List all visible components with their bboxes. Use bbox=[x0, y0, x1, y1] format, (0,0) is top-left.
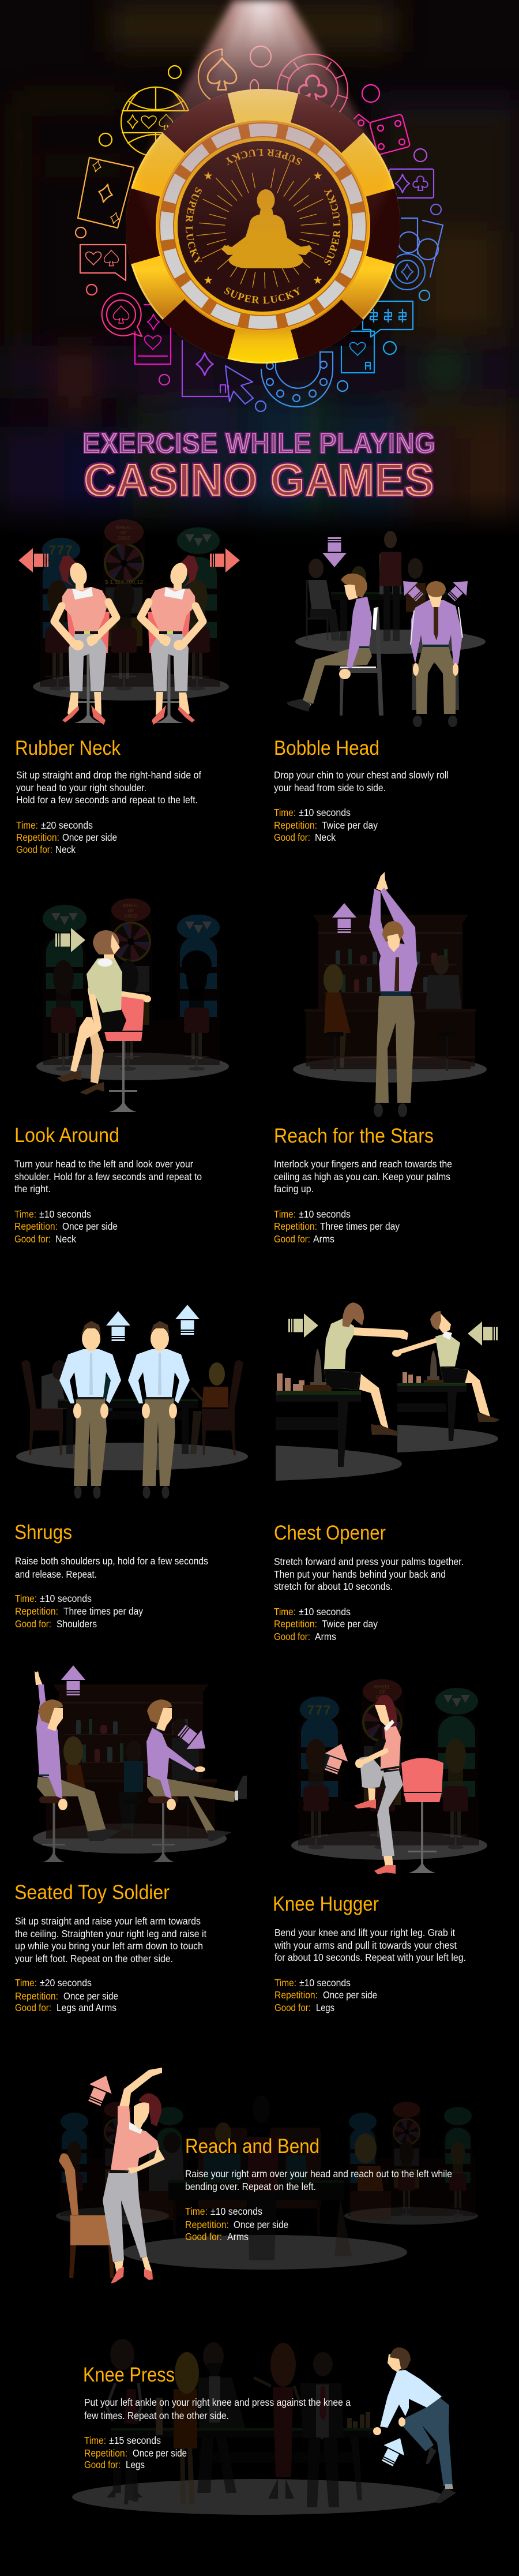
title line two: CASINO GAMES bbox=[84, 454, 434, 506]
text: Rubber Neck: Good for: bbox=[16, 844, 52, 855]
icon: phone bbox=[135, 305, 171, 364]
illustration: slot machines backdrop: GOLD bbox=[124, 913, 138, 919]
icon: spade chip bbox=[198, 49, 258, 104]
neon icon ring bbox=[76, 46, 443, 411]
icon: purple card bbox=[182, 340, 228, 396]
arrow: chin down bbox=[322, 537, 347, 567]
text: Look Around: Time: bbox=[14, 1208, 36, 1220]
text: Look Around: shoulder. Hold for a few seconds and repeat to bbox=[14, 1171, 202, 1182]
text: Rubber Neck: Once per side bbox=[62, 832, 117, 843]
text: Seated Toy Soldier: your left foot. Repeat on the other side. bbox=[15, 1953, 173, 1964]
text: Seated Toy Soldier: the ceiling. Straighten your right leg and raise it bbox=[15, 1928, 206, 1940]
chip dark segments bbox=[126, 93, 400, 359]
arrow: look right bbox=[55, 928, 85, 952]
text: Rubber Neck: your head to your right shoulder. bbox=[16, 782, 146, 793]
text: Reach for the Stars: ceiling as high as you can. Keep your palms bbox=[274, 1171, 450, 1182]
icon: spade speech bubble bbox=[102, 293, 142, 336]
text: Seated Toy Soldier: Good for: bbox=[15, 2002, 51, 2013]
text: Reach for the Stars bbox=[274, 1125, 452, 1245]
text: Knee Hugger: Legs bbox=[316, 2002, 334, 2013]
text: Knee Hugger: Once per side bbox=[323, 1989, 377, 2001]
figure: woman stretching forward bbox=[324, 1302, 408, 1436]
text: Look Around: Look Around bbox=[14, 1124, 119, 1147]
text: Chest Opener bbox=[274, 1522, 464, 1642]
figure: seated man arm raised bbox=[35, 1671, 121, 1862]
text: Shrugs: Shoulders bbox=[57, 1618, 97, 1630]
text: Bobble Head: Repetition: bbox=[274, 819, 317, 831]
figure: woman stretching back bbox=[392, 1311, 500, 1422]
illustration: bar backdrop bbox=[293, 915, 487, 1083]
illustration: slot machines backdrop: GOLD bbox=[117, 536, 131, 541]
chip stars bbox=[203, 170, 323, 287]
illustration: slot machines backdrop: OF bbox=[127, 908, 134, 913]
text: Rubber Neck: Neck bbox=[55, 844, 76, 855]
text: Shrugs: and release. Repeat. bbox=[15, 1568, 97, 1580]
text: Shrugs: Repetition: bbox=[15, 1605, 58, 1617]
text: Bobble Head: your head from side to side. bbox=[274, 782, 386, 793]
panel: Shrugs bbox=[14, 1305, 248, 1630]
figure: woman tilting head right bbox=[141, 555, 203, 725]
text: Seated Toy Soldier: ±20 seconds bbox=[40, 1977, 92, 1989]
text: Shrugs: Good for: bbox=[15, 1618, 51, 1630]
text: Bobble Head: Good for: bbox=[274, 832, 310, 843]
text: Look Around: the right. bbox=[14, 1183, 51, 1195]
text: Seated Toy Soldier: Sit up straight and raise your left arm towards bbox=[15, 1915, 201, 1927]
text: Look Around: Repetition: bbox=[14, 1220, 58, 1232]
icon: heart spade bubble bbox=[80, 245, 126, 280]
text: Chest Opener: ±10 seconds bbox=[299, 1606, 351, 1618]
arrow: arm down bbox=[174, 1720, 213, 1758]
text: Rubber Neck: Repetition: bbox=[16, 832, 59, 843]
icon: cursor arrow bbox=[225, 366, 253, 404]
arrow: press down bbox=[377, 2433, 411, 2469]
text: Chest Opener: Arms bbox=[315, 1631, 336, 1642]
chip lettering: SUPER LUCKY bbox=[224, 287, 300, 304]
chip stars: ★ bbox=[313, 170, 323, 182]
text: Bobble Head: Twice per day bbox=[322, 819, 378, 831]
text: Knee Press: Once per side bbox=[133, 2447, 187, 2459]
illustration: slot machines backdrop: WHEEL bbox=[116, 525, 133, 530]
text: Chest Opener: Time: bbox=[274, 1606, 296, 1618]
text: Look Around: Once per side bbox=[62, 1220, 118, 1232]
text: Knee Press: Put your left ankle on your right knee and press against the knee a bbox=[84, 2397, 351, 2408]
text: Seated Toy Soldier: Seated Toy Soldier bbox=[14, 1881, 170, 1904]
panel: Look Around bbox=[14, 898, 229, 1245]
panel: Reach for the Stars bbox=[274, 872, 487, 1245]
text: Reach and Bend: Arms bbox=[227, 2231, 249, 2242]
text: Reach and Bend bbox=[185, 2135, 452, 2242]
arrow: arm up bbox=[61, 1665, 85, 1695]
icon: diamond card bbox=[78, 158, 134, 228]
panel: Chest Opener bbox=[274, 1302, 500, 1642]
text: Seated Toy Soldier bbox=[14, 1881, 206, 2013]
text: Shrugs bbox=[14, 1521, 208, 1630]
figure: man shrugging bbox=[128, 1321, 190, 1499]
figure: man pressing knee bbox=[373, 2347, 456, 2503]
illustration: floor and tables bbox=[276, 1349, 498, 1481]
illustration: slot machines backdrop bbox=[291, 1679, 487, 1860]
arrow: left bbox=[18, 548, 48, 572]
text: Chest Opener: Then put your hands behind your back and bbox=[274, 1568, 446, 1580]
text: Knee Press: Good for: bbox=[84, 2459, 121, 2470]
chip stars: ★ bbox=[203, 275, 213, 287]
text: Shrugs: Time: bbox=[15, 1593, 37, 1604]
text: Knee Press: Repetition: bbox=[84, 2447, 127, 2459]
meditating figure bbox=[221, 189, 312, 268]
text: Rubber Neck: Time: bbox=[16, 819, 38, 831]
text: Knee Hugger: Knee Hugger bbox=[273, 1893, 379, 1915]
text: Knee Press: ±15 seconds bbox=[109, 2435, 161, 2446]
illustration: slot machines backdrop: WHEEL bbox=[374, 1684, 391, 1690]
text: Chest Opener: stretch for about 10 seconds. bbox=[274, 1581, 393, 1592]
arrow: knee up bbox=[319, 1740, 353, 1776]
text: Reach and Bend: Time: bbox=[185, 2206, 208, 2217]
text: Reach and Bend: Good for: bbox=[185, 2231, 222, 2242]
icon: blue chip bbox=[389, 254, 425, 290]
icon: ace of hearts bbox=[341, 331, 374, 373]
chip stars: ★ bbox=[203, 170, 213, 182]
text: Knee Press: Legs bbox=[126, 2459, 145, 2470]
illustration: dim casino floor backdrop bbox=[56, 2095, 478, 2270]
icon: suits globe bbox=[121, 87, 190, 156]
panel: Knee Hugger bbox=[273, 1679, 487, 2013]
icon: club chip bbox=[277, 54, 348, 125]
illustration: slot machines backdrop: $ 1,114,700,12 bbox=[105, 579, 144, 586]
text: Knee Hugger: for about 10 seconds. Repeat with your left leg. bbox=[274, 1952, 466, 1963]
title line one: EXERCISE WHILE PLAYING bbox=[82, 427, 435, 459]
text: Chest Opener: Good for: bbox=[274, 1631, 310, 1642]
text: Rubber Neck: Sit up straight and drop the right-hand side of bbox=[16, 769, 201, 781]
text: Shrugs: ±10 seconds bbox=[40, 1593, 92, 1604]
panel: Rubber Neck bbox=[15, 519, 240, 855]
text: Knee Hugger: with your arms and pull it towards your chest bbox=[274, 1940, 457, 1951]
text: Knee Hugger: ±10 seconds bbox=[299, 1977, 351, 1989]
arrow: roll left bbox=[396, 574, 426, 604]
text: Knee Hugger: Good for: bbox=[274, 2002, 311, 2013]
text: Look Around bbox=[14, 1124, 202, 1245]
text: Chest Opener: Stretch forward and press your palms together. bbox=[274, 1556, 464, 1567]
text: Reach and Bend: Repetition: bbox=[185, 2219, 229, 2230]
text: Rubber Neck: ±20 seconds bbox=[41, 819, 93, 831]
text: Bobble Head: Neck bbox=[315, 832, 336, 843]
text: Bobble Head: Time: bbox=[274, 807, 296, 818]
text: Shrugs: Three times per day bbox=[63, 1605, 143, 1617]
figure: man reaching up bbox=[369, 872, 418, 1117]
icon: dice bbox=[354, 114, 411, 155]
hero section bbox=[0, 0, 519, 527]
text: Look Around: Neck bbox=[55, 1233, 76, 1245]
illustration: card table backdrop bbox=[295, 531, 486, 654]
text: Chest Opener: Twice per day bbox=[322, 1618, 378, 1630]
figure: woman tilting head left bbox=[54, 555, 116, 725]
text: Knee Hugger: Repetition: bbox=[274, 1989, 318, 2001]
text: Reach and Bend: Reach and Bend bbox=[185, 2135, 319, 2158]
figure: seated man side view bbox=[287, 574, 383, 716]
text: Reach and Bend: Once per side bbox=[234, 2219, 288, 2230]
text: Chest Opener: Chest Opener bbox=[274, 1522, 386, 1544]
text: Knee Press: Time: bbox=[84, 2435, 106, 2446]
icon: dollars speech bubble bbox=[363, 301, 413, 337]
illustration: slot machines backdrop bbox=[33, 519, 229, 701]
text: Seated Toy Soldier: Once per side bbox=[63, 1990, 118, 2002]
arrow: reach up bbox=[83, 2071, 117, 2108]
text: Rubber Neck: Rubber Neck bbox=[15, 737, 121, 759]
arrow: right man shoulders up bbox=[175, 1305, 200, 1335]
illustration: slot machines backdrop bbox=[36, 898, 229, 1080]
text: Reach and Bend: ±10 seconds bbox=[210, 2206, 262, 2217]
text: Bobble Head bbox=[274, 737, 449, 843]
text: Seated Toy Soldier: Time: bbox=[15, 1977, 37, 1989]
text: Look Around: Good for: bbox=[14, 1233, 51, 1245]
icon: suit tag bbox=[389, 169, 434, 198]
panel: Reach and Bend bbox=[56, 2068, 478, 2283]
chip rays bbox=[197, 160, 329, 289]
text: Chest Opener: Repetition: bbox=[274, 1618, 317, 1630]
figure: woman reaching and bending bbox=[103, 2068, 165, 2283]
text: Reach for the Stars: Repetition: bbox=[274, 1220, 317, 1232]
arrow: push right bbox=[288, 1313, 318, 1338]
chip lettering: SUPER LUCKY bbox=[225, 149, 302, 165]
blurred casino backdrop bbox=[0, 0, 519, 556]
chip stars: ★ bbox=[313, 275, 323, 287]
icon: banknotes bbox=[398, 218, 443, 277]
illustration: dim people at table backdrop bbox=[72, 2339, 443, 2515]
illustration: slot machines backdrop: GOLD bbox=[375, 1695, 389, 1700]
text: Reach for the Stars: Arms bbox=[313, 1233, 334, 1245]
panel: Seated Toy Soldier bbox=[14, 1665, 247, 2013]
text: Shrugs: Raise both shoulders up, hold for a few seconds bbox=[15, 1555, 208, 1567]
figure: woman seated looking around bbox=[57, 930, 151, 1112]
text: Bobble Head: Bobble Head bbox=[274, 737, 379, 759]
text: Reach for the Stars: facing up. bbox=[274, 1183, 314, 1195]
text: Reach and Bend: Raise your right arm over your head and reach out to the left while bbox=[185, 2168, 452, 2180]
arrow: up bbox=[332, 903, 356, 933]
text: Reach for the Stars: Time: bbox=[274, 1208, 296, 1220]
text: Knee Press: few times. Repeat on the other side. bbox=[84, 2410, 229, 2421]
panel: Bobble Head bbox=[274, 531, 486, 843]
text: Knee Hugger: Time: bbox=[274, 1977, 296, 1989]
chip lettering: SUPER LUCKY bbox=[186, 187, 202, 264]
text: Reach for the Stars: Good for: bbox=[274, 1233, 310, 1245]
panel: Knee Press bbox=[72, 2339, 456, 2515]
illustration: slot machines backdrop: 777 bbox=[49, 543, 73, 557]
text: Seated Toy Soldier: Legs and Arms bbox=[57, 2002, 116, 2013]
text: Reach for the Stars: Reach for the Stars bbox=[274, 1125, 434, 1147]
text: Knee Hugger: Bend your knee and lift your right leg. Grab it bbox=[274, 1927, 455, 1938]
illustration: slot machines backdrop: 777 bbox=[307, 1703, 332, 1717]
text: Bobble Head: ±10 seconds bbox=[299, 807, 351, 818]
arrow: roll right bbox=[445, 574, 475, 604]
text: Reach for the Stars: ±10 seconds bbox=[299, 1208, 351, 1220]
chip lettering: SUPER LUCKY bbox=[324, 189, 340, 265]
figure: woman hugging knee bbox=[354, 1695, 443, 1874]
illustration: bar backdrop bbox=[33, 1684, 227, 1854]
text: Knee Press bbox=[83, 2364, 351, 2470]
text: Look Around: ±10 seconds bbox=[39, 1208, 91, 1220]
casino chip bbox=[126, 89, 400, 364]
text: Bobble Head: Drop your chin to your chest and slowly roll bbox=[274, 769, 449, 781]
text: Look Around: Turn your head to the left and look over your bbox=[14, 1158, 193, 1170]
text: Shrugs: Shrugs bbox=[14, 1521, 72, 1544]
icon: small circles bbox=[76, 46, 441, 411]
text: Knee Hugger bbox=[273, 1893, 466, 2013]
text: Seated Toy Soldier: Repetition: bbox=[15, 1990, 58, 2002]
arrow: push left bbox=[468, 1321, 498, 1346]
figure: seated man front view bbox=[411, 581, 462, 727]
illustration: slot machines backdrop: OF bbox=[379, 1690, 386, 1695]
figure: brown chair bbox=[59, 2154, 114, 2278]
main title bbox=[82, 427, 435, 506]
figure: man relaxed bbox=[59, 1321, 121, 1499]
illustration: slot machines backdrop: OF bbox=[121, 530, 127, 536]
text: Seated Toy Soldier: up while you bring your left arm down to touch bbox=[15, 1940, 203, 1952]
arrow: left man shoulders up bbox=[106, 1311, 130, 1341]
text: Knee Press: Knee Press bbox=[83, 2364, 175, 2386]
spotlight beam bbox=[136, 0, 392, 242]
illustration: table backdrop bbox=[16, 1360, 248, 1470]
figure: seated man leg raised bbox=[146, 1699, 247, 1862]
icon: horseshoe bbox=[261, 352, 333, 407]
arrow: right bbox=[210, 548, 240, 572]
text: Rubber Neck bbox=[15, 737, 201, 855]
chip lettering bbox=[186, 149, 340, 304]
illustration: slot machines backdrop: WHEEL bbox=[123, 903, 140, 908]
text: Reach for the Stars: Interlock your fingers and reach towards the bbox=[274, 1158, 452, 1170]
text: Reach and Bend: bending over. Repeat on the left. bbox=[185, 2181, 316, 2192]
text: Rubber Neck: Hold for a few seconds and repeat to the left. bbox=[16, 794, 198, 806]
text: Reach for the Stars: Three times per day bbox=[320, 1220, 400, 1232]
